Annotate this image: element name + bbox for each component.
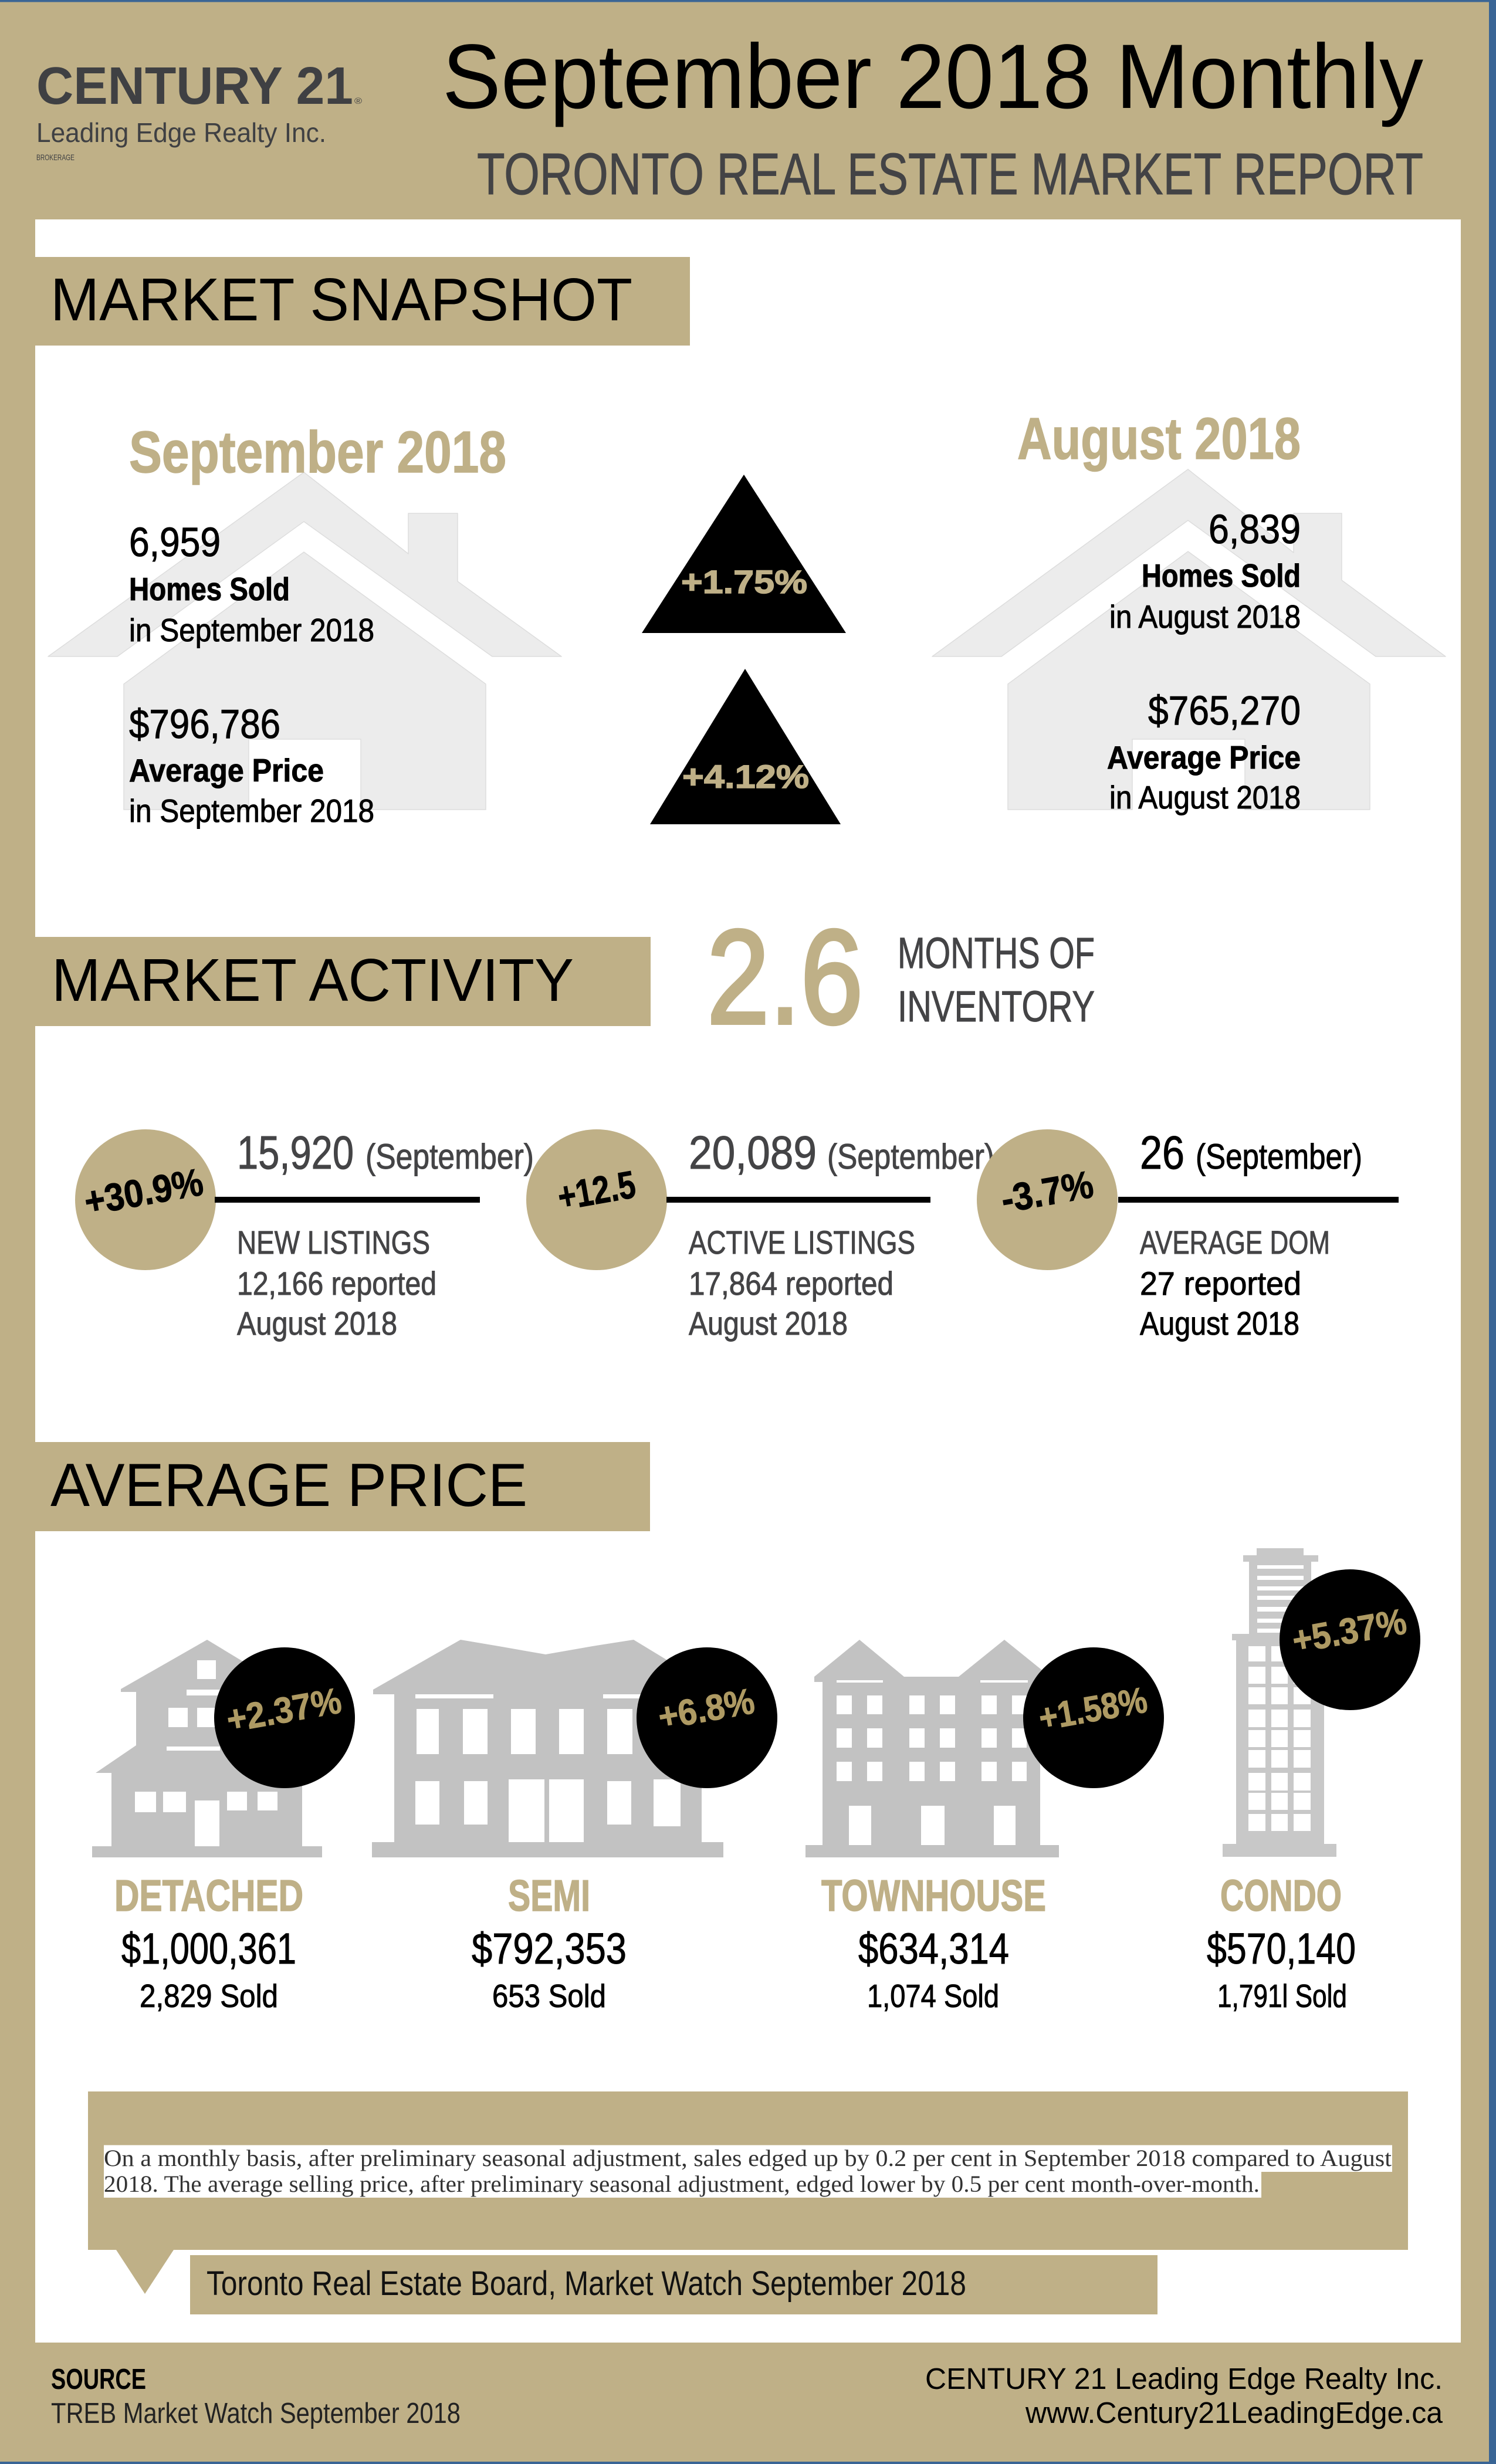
stat: active listings figures xyxy=(689,1126,994,1342)
stat: months of inventory: MONTHS OF xyxy=(898,929,1095,977)
panel: condo xyxy=(1207,1548,1420,2014)
logo: Century 21 Leading Edge Realty: Leading Edge Realty Inc. xyxy=(36,117,326,148)
badge: condo change xyxy=(1280,1569,1420,1710)
badge: new listings change xyxy=(75,1129,216,1270)
badge: semi change: +6.8% xyxy=(655,1681,757,1738)
stat: DOM figures: 26 xyxy=(1140,1126,1184,1179)
stat: homes sold September: Homes Sold xyxy=(129,571,290,607)
callout source bar xyxy=(190,2255,1157,2314)
logo: Century 21 Leading Edge Realty: CENTURY 21 xyxy=(36,57,353,116)
label: semi stats: 653 Sold xyxy=(492,1978,606,2014)
stat: new listings figures: August 2018 xyxy=(237,1305,397,1342)
stat: months of inventory: 2.6 xyxy=(707,903,863,1052)
badge: DOM change xyxy=(977,1129,1118,1270)
badge: new listings change: +30.9% xyxy=(81,1160,207,1223)
label: condo stats: 1,791l Sold xyxy=(1217,1978,1347,2014)
panel: semi xyxy=(372,1640,777,2014)
panel: active listings xyxy=(526,1126,994,1342)
stat: homes sold September: 6,959 xyxy=(129,519,221,565)
heading: average price: AVERAGE PRICE xyxy=(50,1451,527,1519)
callout source bar: Toronto Real Estate Board, Market Watch September 2018 xyxy=(207,2265,966,2303)
logo: Century 21 Leading Edge Realty: BROKERAGE xyxy=(36,153,75,162)
text block: quote xyxy=(104,2145,1392,2197)
stat: average price September: in September 2018 xyxy=(129,793,374,829)
stat: active listings figures: August 2018 xyxy=(689,1305,848,1342)
label: semi stats: SEMI xyxy=(508,1871,590,1920)
callout: TREB quote xyxy=(88,2091,1408,2294)
stat: average price August xyxy=(1107,688,1301,815)
label: semi stats: $792,353 xyxy=(472,1924,627,1973)
stat: average price September xyxy=(129,701,374,829)
stat: active listings figures: (September) xyxy=(827,1137,994,1176)
heading: market activity xyxy=(35,937,651,1026)
footer: company: www.Century21LeadingEdge.ca xyxy=(1025,2396,1443,2429)
heading: market activity: MARKET ACTIVITY xyxy=(52,946,574,1014)
stat: average price September: Average Price xyxy=(129,752,324,788)
icon: up triangle homes sold change xyxy=(642,475,846,633)
stat: DOM figures: August 2018 xyxy=(1140,1305,1299,1342)
icon: detached house xyxy=(92,1640,322,1857)
label: condo stats: CONDO xyxy=(1220,1871,1342,1920)
stat: homes sold September: in September 2018 xyxy=(129,612,374,648)
stat: DOM figures xyxy=(1140,1126,1362,1342)
logo: Century 21 Leading Edge Realty: ® xyxy=(354,96,362,106)
stat: homes sold September xyxy=(129,519,374,648)
stat: DOM figures: AVERAGE DOM xyxy=(1140,1224,1330,1261)
badge: detached change: +2.37% xyxy=(224,1680,344,1741)
stat: average price August: Average Price xyxy=(1107,739,1301,776)
label: townhouse stats: TOWNHOUSE xyxy=(821,1871,1046,1920)
icon: house outline August xyxy=(932,469,1446,810)
icon: up triangle average price change xyxy=(650,669,841,824)
icon: house outline September xyxy=(48,472,561,810)
footer: source: SOURCE xyxy=(51,2364,146,2395)
footer: source: TREB Market Watch September 2018 xyxy=(51,2398,461,2429)
panel: average days on market xyxy=(977,1126,1399,1342)
stat: homes sold August: Homes Sold xyxy=(1142,557,1301,594)
stat: new listings figures xyxy=(237,1126,534,1342)
stat: DOM figures: 27 reported xyxy=(1140,1265,1301,1302)
panel: August 2018 house xyxy=(932,406,1446,815)
badge: townhouse change: +1.58% xyxy=(1036,1680,1150,1739)
label: detached stats: 2,829 Sold xyxy=(140,1978,278,2014)
badge: active listings change: +12.5 xyxy=(554,1162,639,1219)
stat: active listings figures: ACTIVE LISTINGS xyxy=(689,1224,915,1261)
badge: DOM change: -3.7% xyxy=(998,1162,1096,1221)
panel: September 2018 house xyxy=(48,419,561,829)
badge: detached change xyxy=(214,1647,355,1788)
stat: active listings figures: 17,864 reported xyxy=(689,1265,893,1302)
panel: detached xyxy=(92,1640,355,2014)
footer: company: CENTURY 21 Leading Edge Realty Inc. xyxy=(925,2362,1443,2395)
text block: quote: 2018. The average selling price, after preliminary seasonal adjustment, edged lower by 0.5 per cent month-over-month. xyxy=(104,2171,1260,2197)
footer: source xyxy=(51,2364,461,2429)
logo: Century 21 Leading Edge Realty xyxy=(36,57,362,162)
stat: new listings figures: 12,166 reported xyxy=(237,1265,436,1302)
panel: townhouse xyxy=(805,1640,1164,2014)
icon: up triangle homes sold change: +1.75% xyxy=(681,563,807,600)
label: townhouse stats: 1,074 Sold xyxy=(867,1978,999,2014)
badge: condo change: +5.37% xyxy=(1289,1601,1410,1661)
text block: quote: On a monthly basis, after preliminary seasonal adjustment, sales edged up by 0.2 per cent in September 2018 compared to August xyxy=(104,2145,1392,2171)
heading: average price xyxy=(35,1442,650,1531)
label: detached stats: DETACHED xyxy=(114,1871,303,1920)
label: condo stats: $570,140 xyxy=(1207,1924,1356,1973)
panel: new listings xyxy=(75,1126,534,1342)
stat: months of inventory: INVENTORY xyxy=(898,982,1095,1031)
stat: new listings figures: NEW LISTINGS xyxy=(237,1224,430,1261)
stat: homes sold August: in August 2018 xyxy=(1109,598,1301,635)
stat: average price August: $765,270 xyxy=(1148,688,1301,733)
badge: semi change xyxy=(637,1647,777,1788)
label: detached stats xyxy=(114,1871,303,2014)
stat: active listings figures: 20,089 xyxy=(689,1126,817,1179)
stat: DOM figures: (September) xyxy=(1196,1137,1362,1176)
label: condo stats xyxy=(1207,1871,1356,2014)
stat: new listings figures: (September) xyxy=(365,1137,534,1176)
stat: homes sold August: 6,839 xyxy=(1209,506,1301,552)
title: September 2018 Monthly xyxy=(442,26,1423,128)
icon: condo tower xyxy=(1223,1548,1336,1857)
heading: August 2018: August 2018 xyxy=(1017,406,1301,472)
stat: average price August: in August 2018 xyxy=(1109,779,1301,815)
heading: market snapshot xyxy=(35,257,690,346)
stat: homes sold August xyxy=(1109,506,1301,635)
icon: semi-detached house xyxy=(372,1640,723,1857)
label: detached stats: $1,000,361 xyxy=(121,1924,296,1973)
badge: townhouse change xyxy=(1023,1647,1164,1788)
heading: September 2018: September 2018 xyxy=(129,419,506,485)
stat: average price September: $796,786 xyxy=(129,701,280,747)
stat: months of inventory xyxy=(707,903,1095,1052)
label: townhouse stats: $634,314 xyxy=(858,1924,1009,1973)
badge: active listings change xyxy=(526,1129,667,1270)
icon: up triangle average price change: +4.12% xyxy=(682,758,809,795)
label: semi stats xyxy=(472,1871,627,2014)
label: townhouse stats xyxy=(821,1871,1046,2014)
stat: new listings figures: 15,920 xyxy=(237,1126,354,1179)
footer: company xyxy=(925,2362,1443,2429)
heading: market snapshot: MARKET SNAPSHOT xyxy=(50,266,632,333)
icon: townhouse xyxy=(805,1640,1059,1857)
